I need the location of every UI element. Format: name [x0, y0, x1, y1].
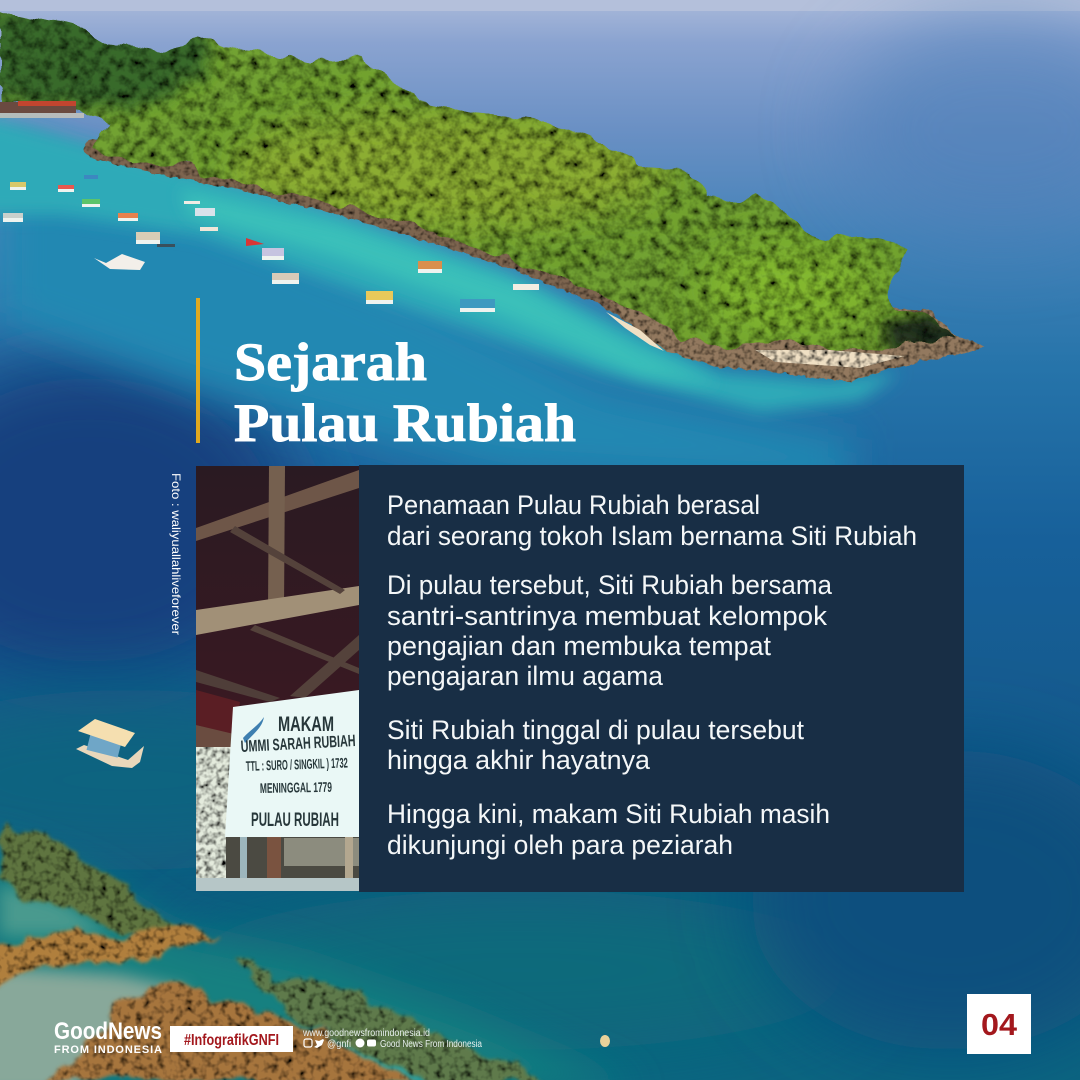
photo: makam sign: TTL : SURO / SINGKIL ) 1732: [246, 754, 348, 774]
footer social links: [302, 1028, 482, 1050]
deep water lower right: [750, 750, 1080, 1050]
sign board: [225, 690, 359, 837]
concrete wall: [196, 878, 359, 891]
paragraph 1: dari seorang tokoh Islam bernama Siti Rubiah: [387, 521, 917, 551]
shallow blue zone: [0, 130, 850, 490]
photo: makam sign: MENINGGAL 1779: [260, 779, 332, 796]
distant buoy boat: [600, 1035, 610, 1047]
photo: makam sign: UMMI SARAH RUBIAH: [240, 732, 356, 756]
paragraph 3: hingga akhir hayatnya: [387, 745, 651, 775]
paragraph 2: pengajian dan membuka tempat: [387, 631, 771, 661]
paragraph 2: Di pulau tersebut, Siti Rubiah bersama: [387, 570, 833, 600]
footer logo: GoodNews: FROM INDONESIA: [54, 1044, 162, 1056]
pale sand: [0, 965, 190, 1080]
village and pier: [0, 101, 84, 118]
light horizon band: [0, 0, 1080, 11]
reef sea bed: [0, 820, 640, 1080]
footer logo: GoodNews: [54, 1018, 162, 1056]
paragraph 2: santri-santrinya membuat kelompok: [387, 601, 828, 631]
photo: makam sign: MAKAM: [278, 713, 334, 736]
paragraph 1: Penamaan Pulau Rubiah berasal: [387, 490, 760, 520]
foreground boat: [76, 719, 144, 768]
green reef band lower: [235, 960, 560, 1080]
pale shallow strip: [0, 885, 110, 935]
title: Pulau Rubiah: [234, 393, 576, 453]
brown coral left: [0, 920, 225, 990]
deep water left: [0, 350, 300, 690]
title: Sejarah: [234, 332, 427, 392]
island forest: [0, 12, 956, 351]
photo: makam sign: [196, 466, 359, 891]
island sandy tip: [600, 290, 985, 382]
darker water far right: [840, 20, 1080, 240]
photo: makam sign: PULAU RUBIAH: [251, 810, 339, 831]
footer social links: www.goodnewsfromindonesia.id: [302, 1028, 430, 1039]
brown coral lower: [45, 985, 430, 1080]
green reef band upper: [0, 820, 190, 945]
island shoreline rocks: [92, 149, 660, 330]
page number: 04: [981, 1007, 1018, 1042]
footer social links: @gnfi: [327, 1039, 351, 1050]
turquoise patch: [330, 1000, 440, 1080]
hashtag label: [170, 1026, 293, 1052]
title accent bar: [196, 298, 200, 443]
beach sand: [606, 312, 905, 368]
sign logo: [243, 717, 264, 743]
hashtag label: #InfografikGNFI: [184, 1032, 279, 1049]
turquoise lagoon: [0, 115, 900, 412]
mid teal water under panel: [180, 890, 860, 1050]
paragraph 3: Siti Rubiah tinggal di pulau tersebut: [387, 715, 804, 745]
icons: facebook and youtube: [356, 1038, 376, 1048]
moored boats: [3, 175, 539, 312]
icons: instagram and twitter: [304, 1039, 324, 1048]
story paragraphs: [387, 490, 917, 860]
dark teal water lower left: [0, 690, 400, 870]
page number: [967, 994, 1031, 1054]
paragraph 2: pengajaran ilmu agama: [387, 661, 664, 691]
roof beams: [196, 466, 359, 748]
foliage behind sign: [196, 747, 230, 878]
bright lagoon strip: [180, 190, 720, 385]
panel: story text background: [359, 465, 964, 892]
footer social links: Good News From Indonesia: [380, 1039, 482, 1050]
paragraph 4: dikunjungi oleh para peziarah: [387, 830, 733, 860]
paragraph 4: Hingga kini, makam Siti Rubiah masih: [387, 799, 830, 829]
teal shallows: [0, 840, 640, 1080]
photo credit: Foto : waliyuallahliveforever: [169, 473, 183, 635]
under-sign fence: [226, 837, 359, 879]
footer logo: GoodNews: GoodNews: [54, 1018, 162, 1045]
